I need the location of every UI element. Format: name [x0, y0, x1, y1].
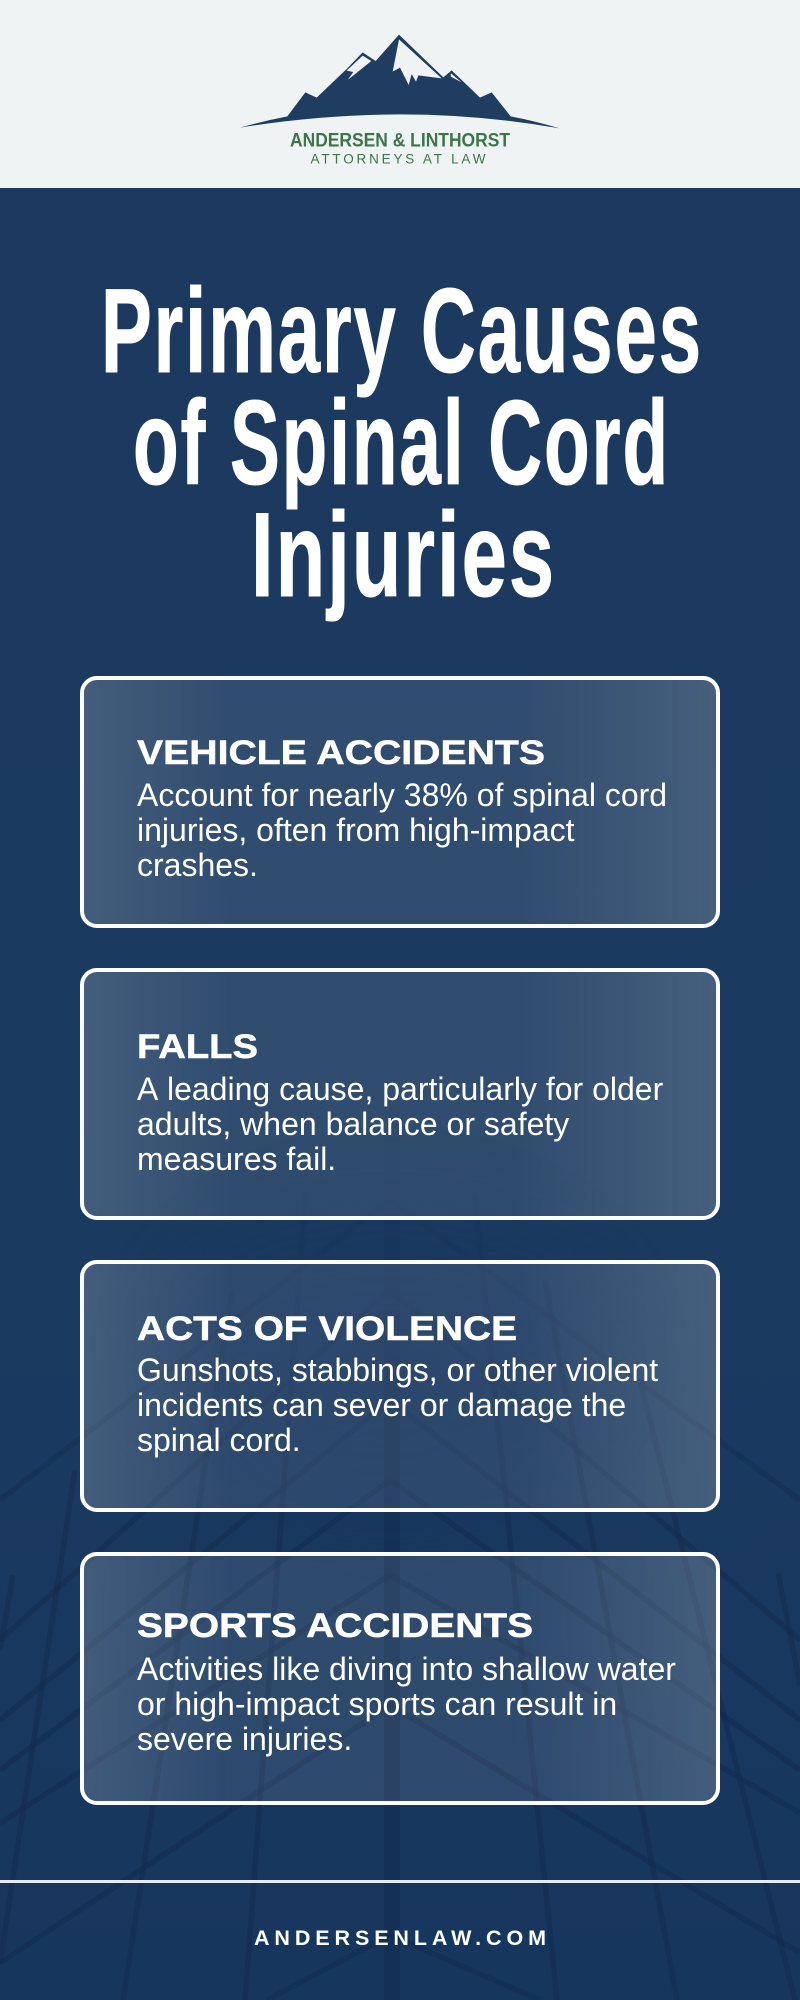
text: acts of violence description: Gunshots, stabbings, or other violent [137, 1352, 658, 1388]
logo: Andersen & Linthorst [240, 35, 559, 166]
text: falls description: adults, when balance or safety [137, 1106, 569, 1142]
panel: sports accidents [82, 1554, 718, 1803]
header band [0, 0, 800, 188]
panel: acts of violence [82, 1262, 718, 1510]
text: vehicle accidents description: Account for nearly 38% of spinal cord [137, 777, 667, 813]
text: falls description: A leading cause, particularly for older [137, 1071, 664, 1107]
logo tagline: ATTORNEYS AT LAW [310, 152, 486, 166]
text: vehicle accidents description [137, 777, 667, 883]
footer divider [0, 1880, 800, 1883]
text: sports accidents description: severe injuries. [137, 1721, 352, 1757]
title [101, 264, 703, 622]
heading: vehicle accidents: VEHICLE ACCIDENTS [137, 734, 545, 772]
text: falls description: measures fail. [137, 1141, 336, 1177]
text: acts of violence description: spinal cord. [137, 1422, 301, 1458]
text: falls description [137, 1071, 664, 1177]
footer website: ANDERSENLAW.COM [254, 1926, 546, 1950]
heading: acts of violence: ACTS OF VIOLENCE [137, 1310, 517, 1348]
text: sports accidents description: or high-impact sports can result in [137, 1686, 617, 1722]
icon: mountain [240, 35, 559, 128]
text: sports accidents description [137, 1651, 676, 1757]
text: acts of violence description [137, 1352, 658, 1458]
background: building glass perspective lines [0, 1372, 800, 2000]
logo firm name: ANDERSEN & LINTHORST [290, 130, 510, 152]
panel: vehicle accidents [82, 678, 718, 926]
heading: sports accidents: SPORTS ACCIDENTS [137, 1607, 533, 1645]
text: vehicle accidents description: crashes. [137, 847, 258, 883]
panel: falls [82, 970, 718, 1218]
title: Injuries [251, 488, 556, 622]
heading: falls: FALLS [137, 1028, 258, 1066]
text: vehicle accidents description: injuries, often from high-impact [137, 812, 575, 848]
text: sports accidents description: Activities like diving into shallow water [137, 1651, 676, 1687]
text: acts of violence description: incidents can sever or damage the [137, 1387, 626, 1423]
